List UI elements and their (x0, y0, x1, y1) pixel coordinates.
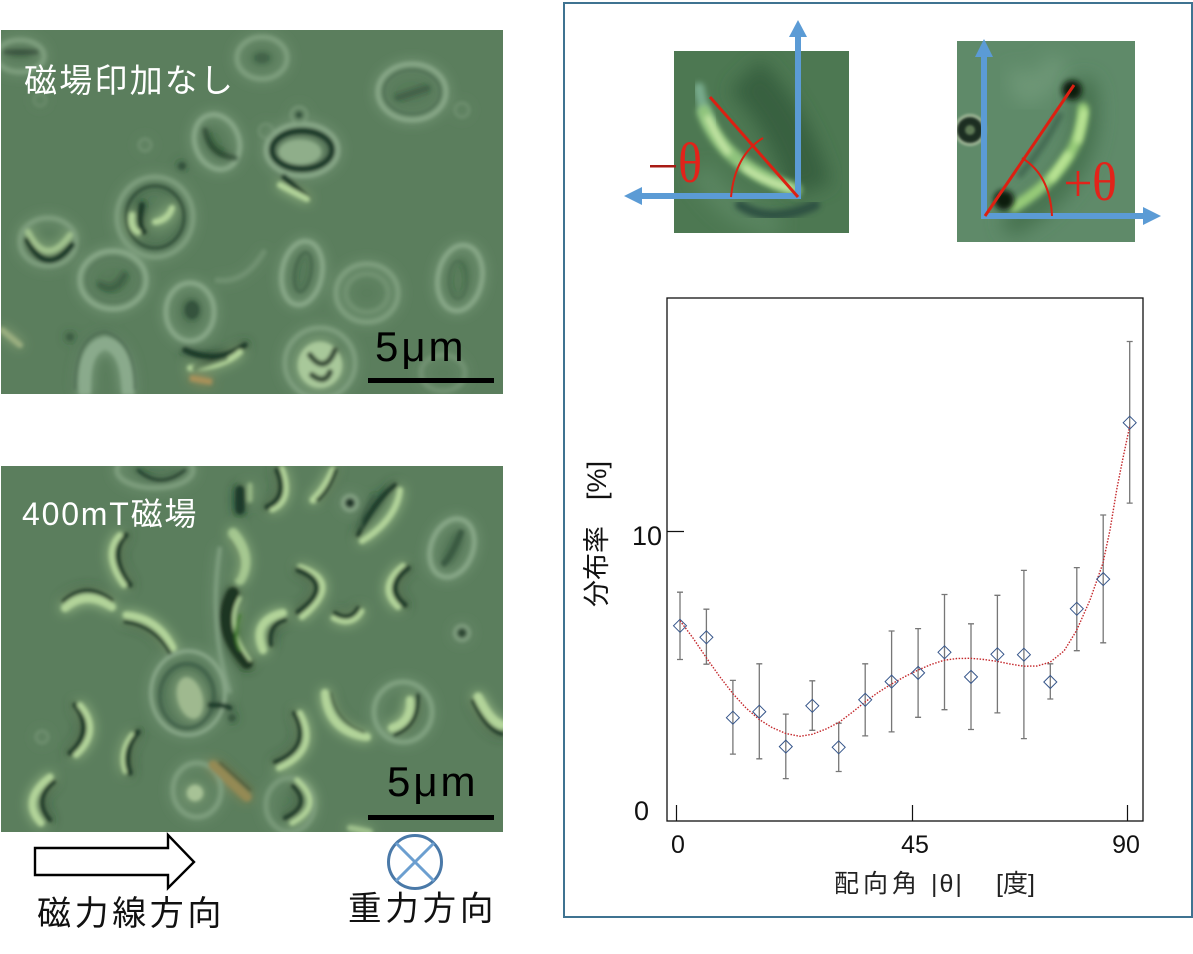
error bars (677, 342, 1133, 779)
label: gravity direction: 重力方向 (348, 891, 497, 928)
label: magnetic field direction: 磁力線方向 (37, 895, 225, 933)
axis ticks (667, 532, 1128, 821)
heading: 400 mT field: 400mT磁場 (22, 496, 198, 532)
data markers (674, 416, 1136, 754)
panel: angle definition and distribution chart (564, 3, 1192, 917)
label: minus theta (650, 132, 702, 195)
x tick labels: 0 (671, 831, 685, 859)
x axis title: 配向角 (834, 870, 921, 898)
chart: orientation angle distribution (582, 298, 1143, 898)
x axis title: |θ| (931, 870, 964, 898)
cell image (954, 41, 1135, 242)
y tick labels (632, 521, 662, 826)
micrograph image: cells without field (0, 30, 503, 398)
x tick labels: 90 (1112, 831, 1140, 859)
label: plus theta (1066, 152, 1117, 212)
panel: micrograph without magnetic field (0, 30, 503, 398)
cell axis and angle arc (985, 85, 1074, 216)
panel: micrograph with 400 mT field (1, 452, 503, 832)
inset: negative angle cell (624, 20, 849, 233)
scale label: 5μm (387, 758, 479, 805)
micrograph image: cells aligned in field (1, 452, 503, 832)
scale bar (368, 378, 494, 383)
icon: gravity into page (388, 836, 442, 888)
label: plus theta: θ (1092, 152, 1117, 212)
plot frame (667, 298, 1143, 821)
y axis title: [%] (582, 461, 612, 500)
x tick labels (671, 831, 1140, 859)
y tick labels: 0 (634, 796, 649, 826)
scale label: 5μm (375, 323, 467, 370)
heading: no field applied: 磁場印加なし (24, 62, 235, 99)
arrow: magnetic field direction (35, 835, 194, 888)
cell axis and angle arc (710, 97, 798, 197)
axes arrows (975, 39, 1161, 225)
cell image (674, 51, 849, 233)
label: minus theta: θ (678, 132, 702, 195)
x axis title: [度] (996, 870, 1035, 898)
inset: positive angle cell (954, 39, 1161, 242)
scale bar (368, 815, 494, 820)
axes arrows (624, 20, 807, 205)
y tick labels: 10 (632, 521, 662, 551)
x tick labels: 45 (901, 831, 929, 859)
y axis title: 分布率 (582, 526, 612, 607)
fitted curve (680, 427, 1130, 736)
